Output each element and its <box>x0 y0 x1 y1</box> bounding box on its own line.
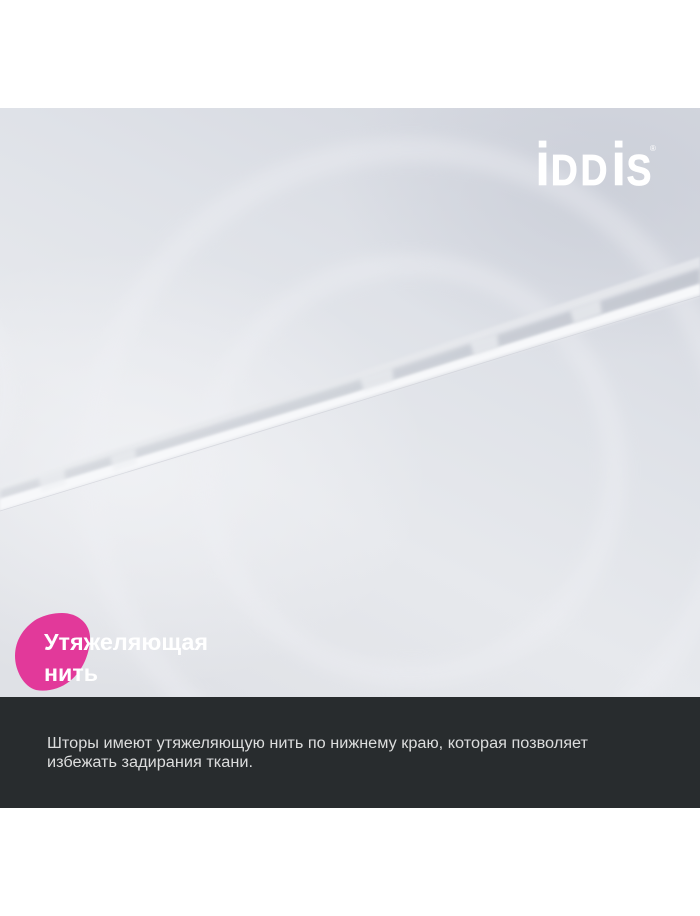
logo: iDDiS: ® <box>650 144 656 153</box>
icon: pink blob <box>15 613 90 691</box>
fabric watermark rings <box>370 143 700 328</box>
photo: fabric background <box>0 108 700 697</box>
description text: Шторы имеют утяжеляющую нить по нижнему краю, которая позволяет <box>47 735 588 752</box>
bottom dark panel <box>0 697 700 808</box>
description text: избежать задирания ткани. <box>47 754 253 771</box>
logo: iDDiS: S <box>626 145 651 195</box>
logo: iDDiS: D <box>551 145 578 195</box>
heading <box>44 629 208 686</box>
weighted hem band <box>0 257 700 511</box>
hem thread knots <box>38 300 602 492</box>
heading: Утяжеляющая <box>44 629 208 655</box>
heading: нить <box>44 660 98 686</box>
logo: iDDiS <box>536 131 656 198</box>
logo: iDDiS: D <box>581 145 608 195</box>
logo: iDDiS: i <box>612 131 626 198</box>
logo: iDDiS: i <box>536 131 550 198</box>
